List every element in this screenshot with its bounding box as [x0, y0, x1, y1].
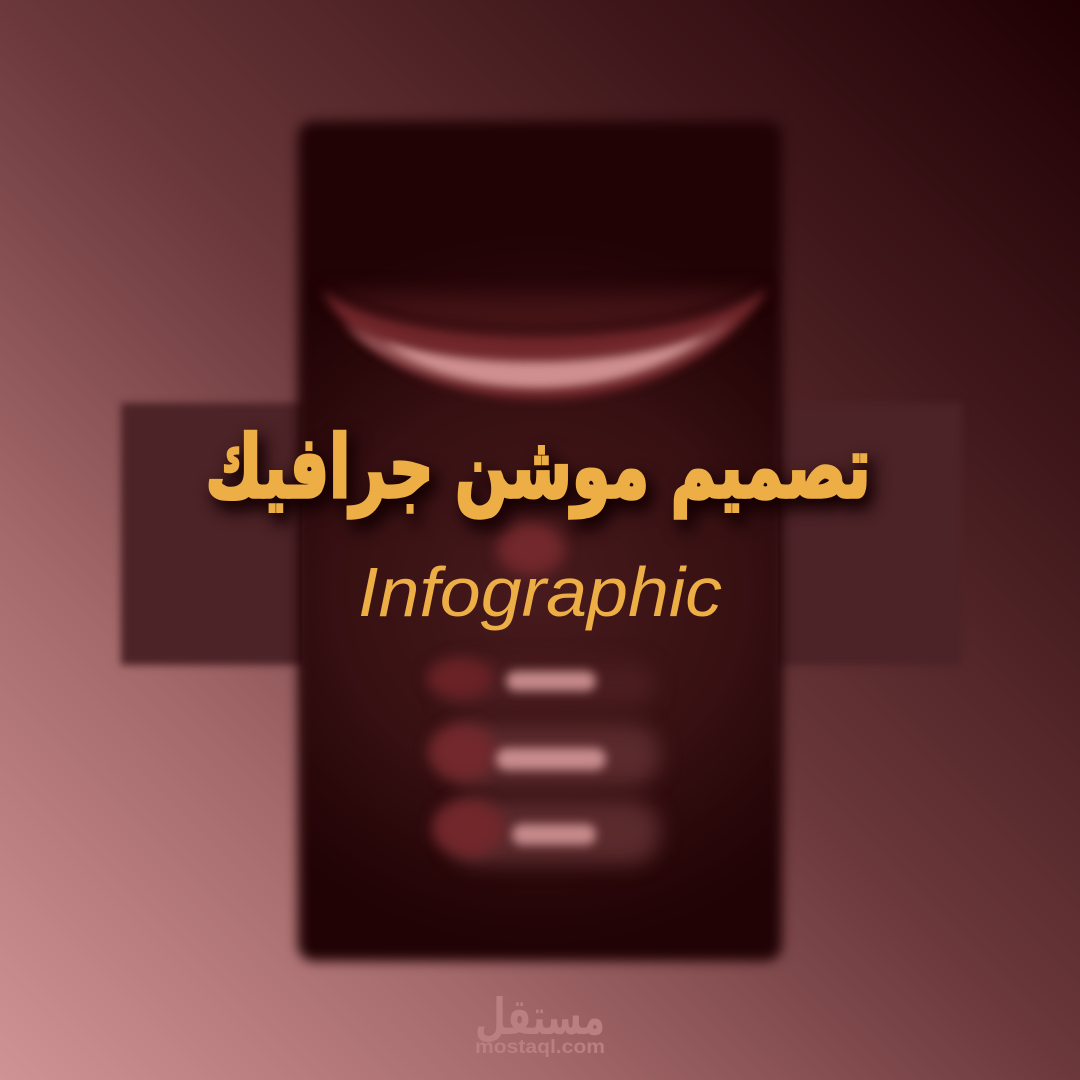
blurred heart icon [497, 523, 565, 575]
row 1 [427, 658, 655, 708]
row 3 [432, 800, 660, 864]
blurred horizontal band [121, 403, 962, 665]
row 2 [428, 724, 660, 786]
watermark domain: mostaql.com [475, 1037, 605, 1058]
watermark Arabic word: مستقل [475, 988, 605, 1046]
blurred glowing arc [322, 288, 768, 399]
blurred phone panel [298, 121, 782, 961]
blurred list rows [427, 658, 660, 864]
watermark: mostaql logo [475, 988, 605, 1058]
subtitle: Infographic: Infographic [358, 553, 722, 631]
phone inner glow [302, 355, 778, 878]
